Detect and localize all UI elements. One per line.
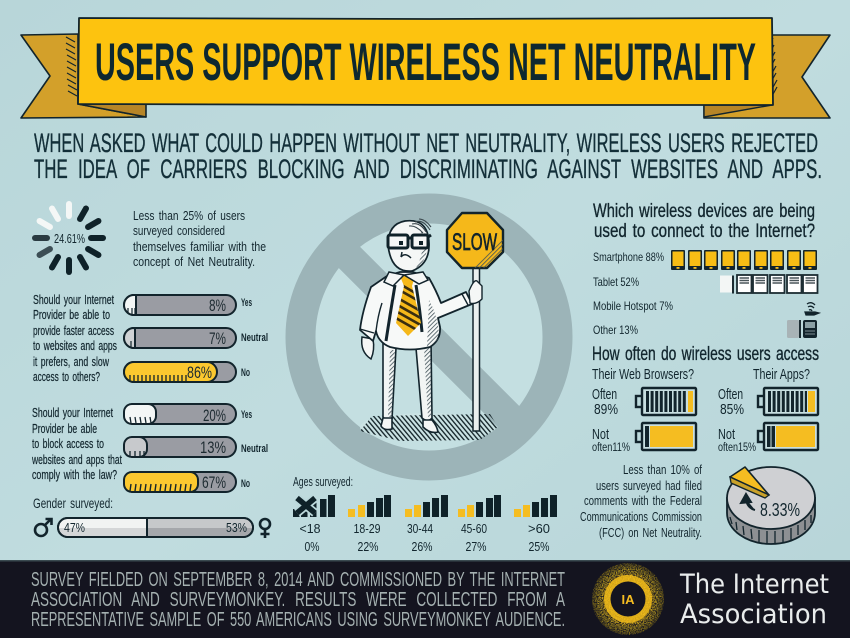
- pie slice: [730, 467, 769, 495]
- familiarity text: surveyed considered: [133, 223, 225, 238]
- cuff and sleeve lines: [360, 294, 468, 333]
- apps not often battery: often15%: [718, 442, 756, 454]
- spinner spokes: [35, 204, 103, 272]
- gender bar: 47%: [64, 520, 85, 535]
- logo: IA mark: IA: [622, 592, 635, 607]
- stop pole: [473, 262, 480, 431]
- familiarity text: themselves familiar with the: [133, 239, 266, 254]
- pie value: 8.33%: [760, 500, 800, 520]
- web browsers not often battery: Not: [592, 426, 610, 443]
- illustration: man holding slow sign: [360, 213, 503, 441]
- organisation name: Association: [680, 599, 827, 630]
- collar: [384, 272, 428, 286]
- hand on pole: [469, 281, 482, 304]
- spinner value: 24.61%: [54, 231, 85, 246]
- head shading: [416, 232, 427, 268]
- age group: 45-60: 45-60: [461, 521, 487, 536]
- apps not often battery: [718, 423, 818, 454]
- right ribbon tail: [704, 35, 830, 118]
- bar: no 67%: 67%: [202, 473, 226, 492]
- gender heading: Gender surveyed:: [33, 495, 113, 511]
- gender bar: [58, 518, 253, 537]
- survey note: REPRESENTATIVE SAMPLE OF 550 AMERICANS USING SURVEYMONKEY AUDIENCE.: [31, 609, 565, 631]
- stop sign: [447, 213, 503, 268]
- ribbon shading: [66, 37, 777, 96]
- device row: tablet: Tablet 52%: [593, 275, 639, 289]
- device row: mobile hotspot: [593, 299, 819, 315]
- question 1 text: it prefers, and slow: [33, 355, 110, 369]
- banner: [21, 18, 830, 118]
- bar: yes 20%: Yes: [241, 409, 252, 421]
- survey note: [31, 569, 565, 631]
- question 2 text: Should your Internet: [32, 406, 113, 420]
- question 1 text: [33, 293, 117, 384]
- mouth: [401, 252, 411, 258]
- age group: 45-60: 27%: [466, 539, 487, 554]
- bar: neutral 13%: Neutral: [241, 443, 268, 455]
- bar: yes 8%: [124, 295, 252, 315]
- age group: 18-29: 22%: [358, 539, 379, 554]
- right ribbon fold: [704, 105, 772, 117]
- fcc text: users surveyed had filed: [596, 478, 702, 493]
- age group: under 18: <18: [300, 521, 320, 536]
- question 2 text: websites and apps that: [31, 453, 122, 467]
- left ribbon fold: [78, 104, 146, 117]
- survey note: SURVEY FIELDED ON SEPTEMBER 8, 2014 AND COMMISSIONED BY THE INTERNET: [31, 569, 565, 591]
- ground shadow: [360, 413, 496, 441]
- age group: over 60: 25%: [528, 539, 550, 554]
- fcc text: Communications Commission: [580, 509, 702, 524]
- icon: hotspot: [805, 303, 819, 315]
- web browsers not often battery: often11%: [592, 442, 630, 454]
- access heading: [592, 344, 819, 383]
- question 2 bars: [124, 404, 268, 492]
- devices heading: [593, 201, 815, 242]
- bar: no 86%: 86%: [187, 363, 212, 382]
- question 2 text: [31, 406, 122, 482]
- web browsers not often battery: [592, 423, 696, 454]
- apps not often battery: Not: [718, 426, 736, 443]
- age group: 30-44: 26%: [412, 539, 433, 554]
- organisation name: The Internet: [679, 569, 829, 600]
- bar: yes 20%: 20%: [203, 406, 226, 425]
- web browsers often battery: [592, 386, 696, 418]
- torso shading: [427, 300, 439, 347]
- familiarity text: Less than 25% of users: [133, 208, 245, 223]
- shirt silhouette: [360, 272, 472, 350]
- question 2 text: Provider be able: [32, 422, 97, 436]
- fcc text: [580, 462, 702, 540]
- pie chart: [727, 467, 815, 544]
- fcc text: Less than 10% of: [623, 462, 702, 477]
- web browsers often battery: Often: [592, 386, 617, 403]
- prohibition sign backdrop: [300, 208, 558, 466]
- head: [388, 221, 429, 271]
- device row: other: Other 13%: [593, 323, 638, 337]
- question 1 bars: [124, 295, 268, 382]
- leg shading: [388, 345, 431, 417]
- question 1 text: Provider be able to: [33, 308, 110, 322]
- question 2 text: comply with the law?: [32, 468, 117, 482]
- fcc text: comments with the Federal: [584, 493, 702, 508]
- banner body: [78, 18, 773, 105]
- access heading: Their Web Browsers?: [592, 366, 694, 383]
- shoes: [381, 418, 438, 432]
- familiarity text: concept of Net Neutrality.: [133, 254, 255, 269]
- icon: male symbol: [35, 519, 52, 536]
- bar: no 86%: [124, 362, 250, 382]
- left ribbon tail: [21, 34, 146, 118]
- fcc text: (FCC) on Net Neutrality.: [599, 525, 702, 540]
- apps often battery: 85%: [720, 401, 744, 418]
- bar: neutral 7%: Neutral: [241, 332, 268, 344]
- bar: yes 8%: 8%: [209, 296, 226, 315]
- age group: 18-29: [348, 495, 391, 554]
- age group: 30-44: 30-44: [407, 521, 433, 536]
- question 1 text: Should your Internet: [33, 293, 114, 307]
- pie top: [727, 467, 815, 529]
- question 1 text: provide faster access: [33, 324, 114, 338]
- stop sign: SLOW: [452, 229, 497, 256]
- glasses: [388, 235, 431, 248]
- ages surveyed: [293, 475, 557, 554]
- eyes: [399, 241, 423, 245]
- apps often battery: [718, 386, 818, 418]
- bar: neutral 7%: [124, 328, 268, 348]
- icon: female symbol: [260, 519, 270, 538]
- device row: other: [593, 320, 817, 338]
- bar: neutral 13%: [124, 437, 268, 457]
- left hand: [362, 337, 374, 359]
- familiarity spinner: [35, 204, 103, 272]
- bar: no 67%: [124, 472, 250, 492]
- age group: 18-29: 18-29: [354, 521, 380, 536]
- subtitle: [34, 128, 822, 184]
- survey note: ASSOCIATION AND SURVEYMONKEY. RESULTS WERE COLLECTED FROM A: [31, 589, 565, 611]
- age group: 45-60: [458, 495, 501, 554]
- device row: smartphone: Smartphone 88%: [593, 250, 664, 264]
- question 1 text: access to others?: [33, 370, 100, 384]
- device row: smartphone: [593, 250, 817, 270]
- pie base: [727, 498, 815, 544]
- bar: yes 20%: [124, 404, 252, 425]
- age group: over 60: [514, 495, 557, 554]
- logo: IA mark: [592, 563, 664, 635]
- age group: over 60: >60: [528, 521, 550, 536]
- web browsers often battery: 89%: [594, 401, 618, 418]
- age group: 30-44: [405, 495, 448, 554]
- bar: neutral 13%: 13%: [200, 438, 226, 457]
- familiarity text: [133, 208, 266, 269]
- bar: yes 8%: Yes: [241, 297, 252, 309]
- bar: no 86%: No: [241, 367, 250, 379]
- question 2 text: to block access to: [32, 437, 104, 451]
- age group: under 18: 0%: [304, 539, 320, 554]
- organisation name: [679, 569, 829, 630]
- gender surveyed: [33, 495, 270, 538]
- bar: no 67%: No: [241, 478, 250, 490]
- bar: neutral 7%: 7%: [209, 329, 226, 348]
- access heading: Their Apps?: [753, 366, 810, 383]
- device row: tablet: [593, 275, 818, 294]
- legs: [383, 340, 432, 421]
- age group: under 18: [293, 495, 335, 554]
- ages heading: Ages surveyed:: [293, 475, 353, 489]
- curved arrow: [741, 494, 755, 510]
- device row: mobile hotspot: Mobile Hotspot 7%: [593, 299, 673, 313]
- icon: other devices: [787, 320, 817, 338]
- tie: [396, 276, 421, 336]
- apps often battery: Often: [718, 386, 743, 403]
- gender bar: 53%: [226, 520, 247, 535]
- icon: smartphones: [671, 250, 817, 270]
- hair: [409, 219, 431, 233]
- icon: tablets: [720, 275, 818, 294]
- shirt opening: [386, 285, 422, 341]
- ground hatching: [360, 414, 498, 441]
- question 1 text: to websites and apps: [33, 339, 117, 353]
- footer: [0, 560, 850, 638]
